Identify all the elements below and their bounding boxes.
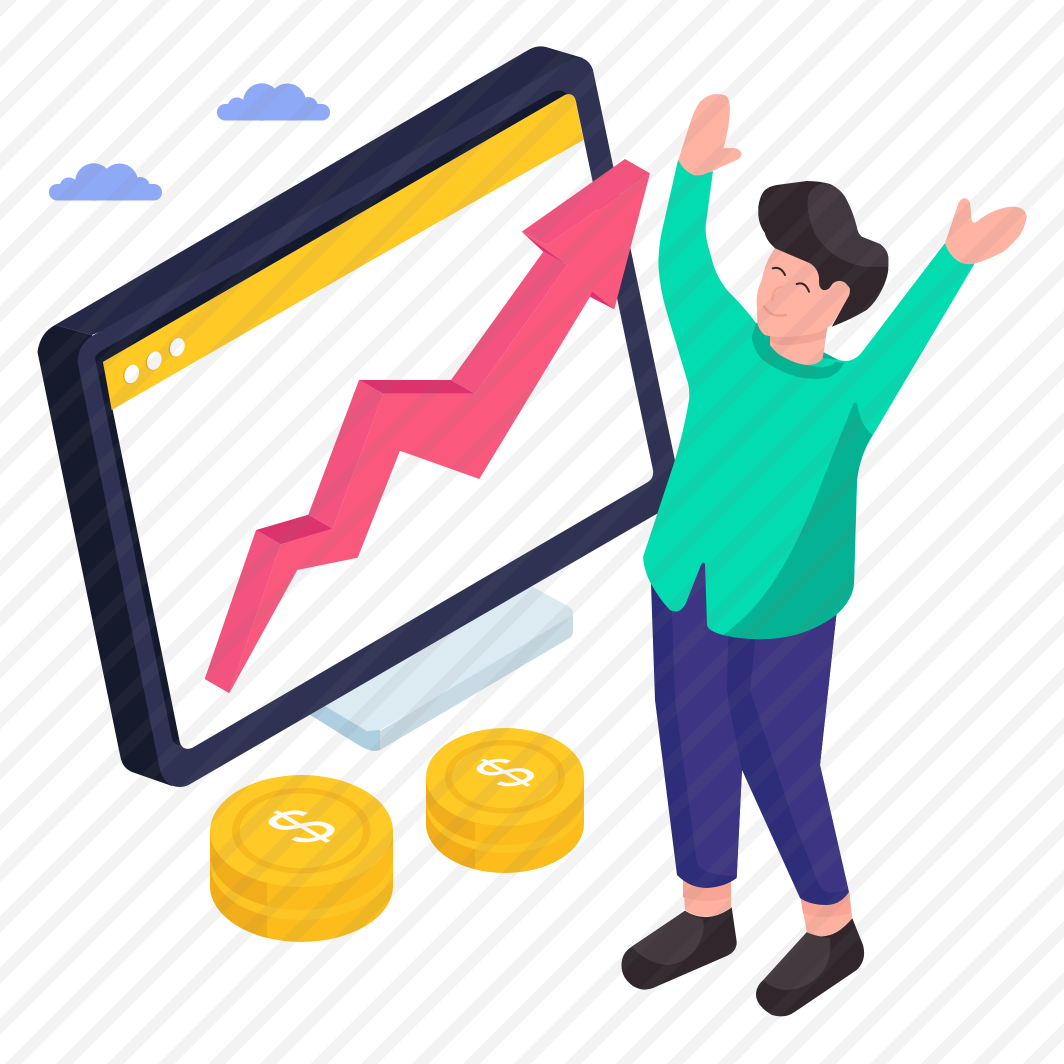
nose [772, 287, 782, 300]
icon: cloud lower [49, 163, 162, 201]
coin stack small [426, 728, 584, 873]
monitor screen [103, 94, 653, 749]
right leg [728, 600, 849, 905]
right shoe [756, 918, 864, 1016]
monitor inner shadow [95, 91, 568, 745]
browser title bar [103, 94, 584, 410]
sweater shadow [723, 402, 873, 639]
eyes [773, 268, 809, 292]
dollar sign: $ [245, 798, 359, 855]
left leg [650, 555, 755, 888]
raised left hand [678, 94, 742, 175]
monitor left side [38, 325, 200, 786]
collar front [752, 323, 844, 379]
left ankle [683, 880, 731, 917]
face [757, 240, 850, 337]
hair [758, 181, 888, 327]
coin stack large [210, 775, 393, 942]
raised right hand [945, 198, 1027, 264]
trousers [650, 555, 849, 905]
monitor bezel [78, 58, 678, 787]
hair highlight [808, 183, 888, 267]
person [622, 94, 1027, 1016]
dollar sign: $ [456, 748, 555, 797]
neck [770, 322, 828, 365]
monitor top side [55, 46, 583, 335]
browser window dots [120, 336, 187, 386]
monitor stand base [300, 586, 573, 751]
right ankle [800, 892, 852, 936]
mouth [764, 306, 786, 316]
sweater [643, 160, 975, 639]
icon: cloud upper [217, 83, 330, 121]
neck collar [752, 323, 844, 379]
rising arrow [205, 159, 650, 693]
monitor [38, 46, 678, 787]
left shoe [622, 907, 737, 990]
